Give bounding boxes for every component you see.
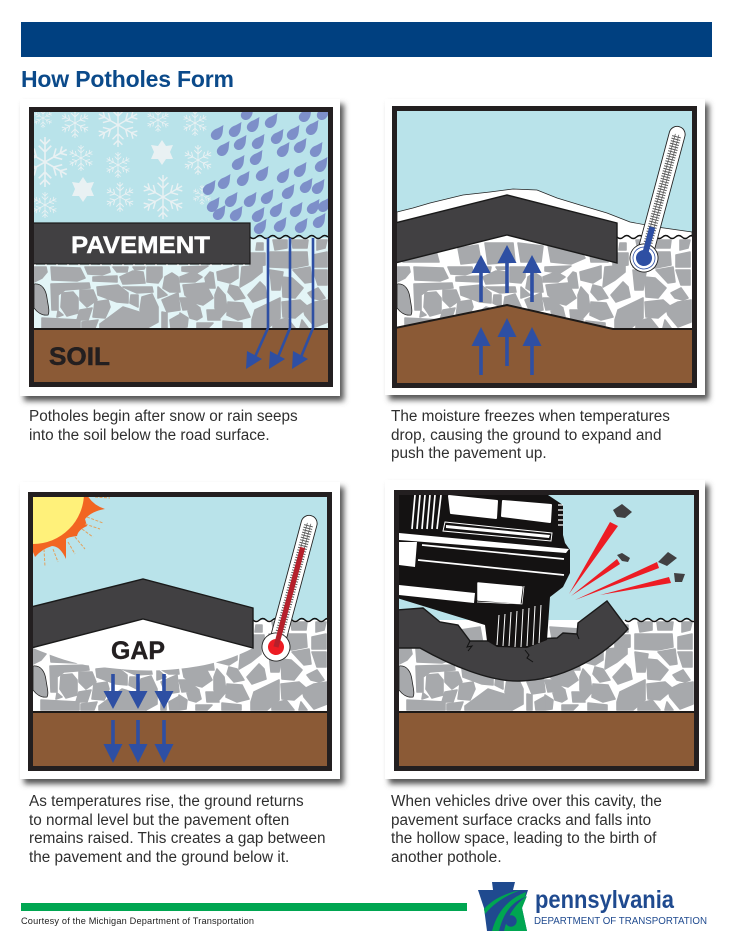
caption 4: pavement surface cracks and falls into xyxy=(391,812,651,829)
thermometer hot xyxy=(262,514,318,662)
caption 2: push the pavement up. xyxy=(391,445,547,462)
snow layer xyxy=(397,189,692,240)
caption 2: drop, causing the ground to expand and xyxy=(391,427,661,444)
header band xyxy=(21,22,712,57)
wordmark: pennsylvania xyxy=(535,886,675,914)
snowflakes xyxy=(34,112,212,219)
vehicle xyxy=(397,495,570,648)
soil xyxy=(32,329,330,385)
upward arrows xyxy=(472,245,542,375)
gap xyxy=(33,619,253,671)
soil: SOIL xyxy=(49,343,110,371)
caption 2: The moisture freezes when temperatures xyxy=(391,408,670,425)
caption 3: to normal level but the pavement often xyxy=(29,812,289,829)
soil xyxy=(397,712,696,769)
soil xyxy=(31,712,329,768)
caption 4: the hollow space, leading to the birth of xyxy=(391,830,657,847)
gap: GAP xyxy=(111,637,165,665)
red impact streaks xyxy=(569,522,671,600)
panel: step 2 ground freezes and expands xyxy=(385,99,709,400)
panel: step 1 snow and rain seep in xyxy=(20,99,344,401)
caption 4: another pothole. xyxy=(391,849,502,866)
department line: DEPARTMENT OF TRANSPORTATION xyxy=(534,916,707,927)
panel: step 3 thaw creates a gap xyxy=(20,482,348,788)
panel: step 4 vehicle breaks the pavement xyxy=(385,480,709,784)
downward arrows xyxy=(104,674,174,763)
caption 3: the pavement and the ground below it. xyxy=(29,849,289,866)
flying debris xyxy=(613,504,685,582)
pavement: PAVEMENT xyxy=(71,232,210,259)
courtesy credit: Courtesy of the Michigan Department of Transportation xyxy=(21,916,254,926)
caption 3: remains raised. This creates a gap between xyxy=(29,830,325,847)
windows xyxy=(449,496,551,522)
raised pavement xyxy=(395,195,617,263)
broken pavement xyxy=(397,601,628,681)
caption 1: into the soil below the road surface. xyxy=(29,427,270,444)
soil xyxy=(395,305,694,385)
pavement xyxy=(30,223,250,265)
seepage arrows xyxy=(246,238,313,369)
title: How Potholes Form xyxy=(21,66,234,92)
sun xyxy=(33,497,110,566)
rain drops xyxy=(203,105,330,234)
caption 1: Potholes begin after snow or rain seeps xyxy=(29,408,298,425)
thermometer cold xyxy=(630,126,686,272)
caption 3: As temperatures rise, the ground returns xyxy=(29,793,304,810)
caption 4: When vehicles drive over this cavity, the xyxy=(391,793,662,810)
raised pavement xyxy=(31,579,253,648)
logo: PennDOT keystone and wordmark xyxy=(478,882,707,931)
icon: keystone xyxy=(478,882,528,931)
footer green bar xyxy=(21,903,467,911)
